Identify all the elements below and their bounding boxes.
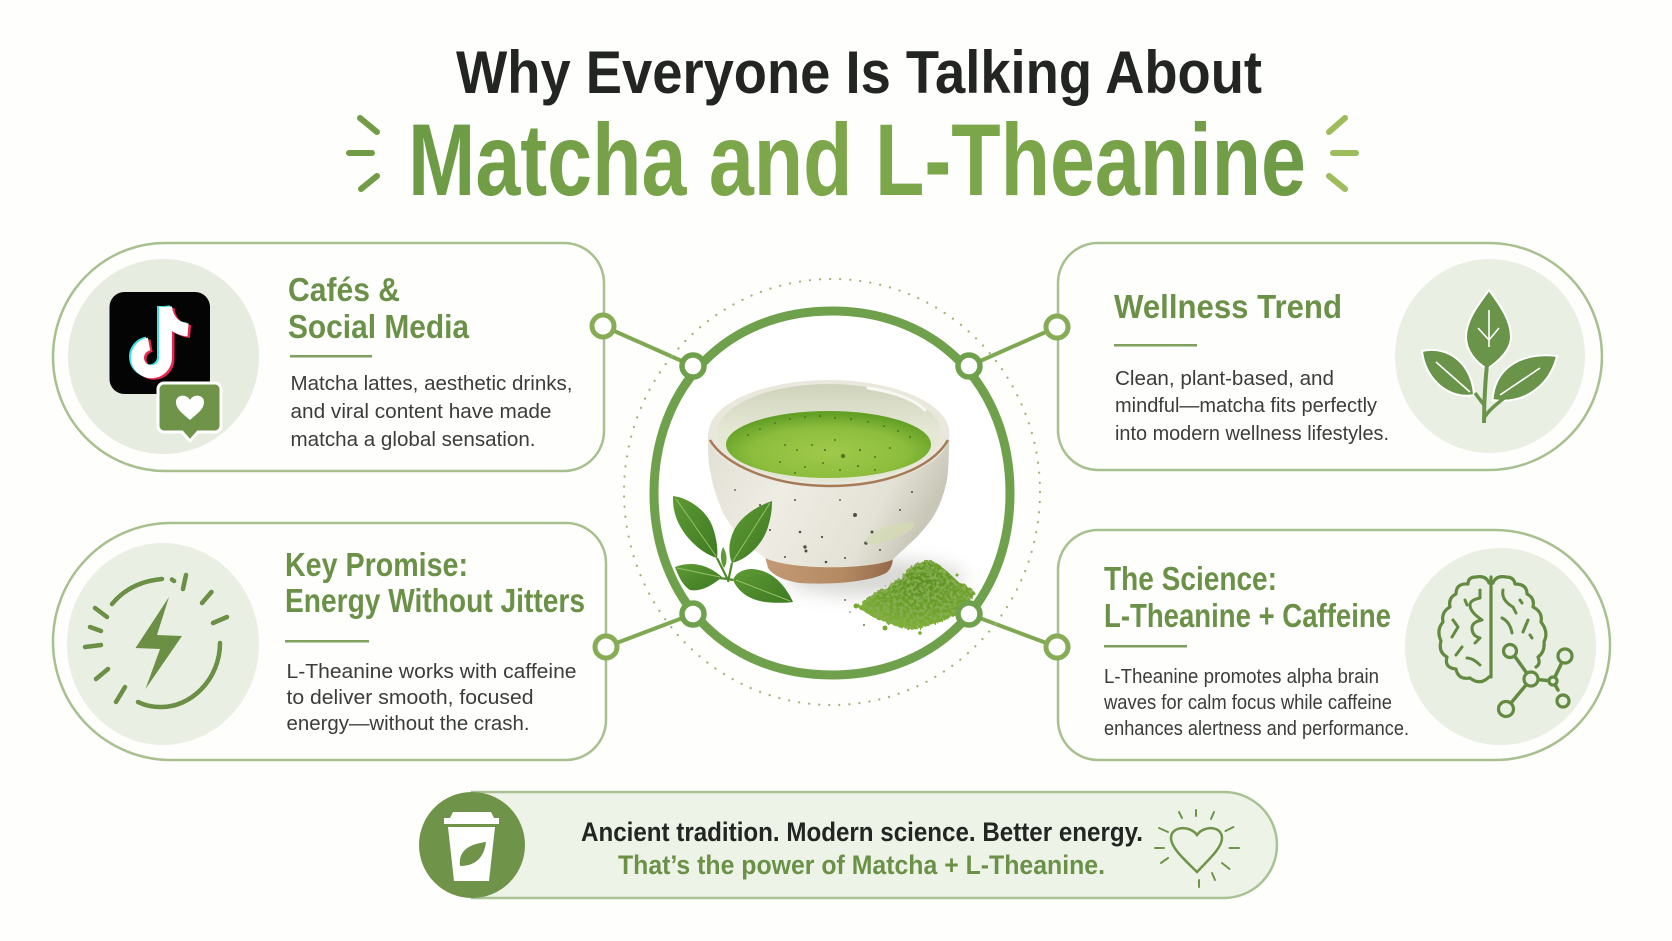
body text: Clean, plant-based, and [1115, 367, 1334, 390]
body text [1103, 665, 1409, 740]
body text [286, 660, 576, 735]
matcha surface [726, 411, 931, 478]
bowl shadow [785, 560, 965, 596]
rim brown edge [710, 440, 948, 486]
body text: and viral content have made [290, 400, 552, 423]
heading: Wellness Trend [1114, 289, 1342, 326]
heading: Social Media [288, 309, 469, 346]
heading: Cafés & [288, 272, 400, 309]
panel: wellness trend [1058, 243, 1602, 470]
connector nodes: ring [682, 355, 980, 625]
body text: waves for calm focus while caffeine [1103, 691, 1392, 714]
icon: brain and molecule [1439, 577, 1572, 716]
rim highlight [868, 388, 925, 410]
bowl glaze tint [863, 518, 917, 548]
icon circle [1405, 548, 1596, 745]
bowl rim [708, 380, 950, 487]
bowl foot [765, 556, 893, 584]
icon circle [1395, 259, 1585, 453]
body text: to deliver smooth, focused [286, 686, 534, 709]
icon circle [68, 259, 259, 454]
icon: tiktok [110, 292, 210, 394]
heading [285, 547, 585, 620]
icon: right sparkle rays [1329, 118, 1356, 189]
heading rule [285, 640, 369, 642]
matcha speckles [747, 415, 911, 474]
body text: enhances alertness and performance. [1104, 717, 1409, 740]
heading rule [1104, 645, 1187, 648]
body text: Matcha lattes, aesthetic drinks, [290, 372, 572, 395]
heading [1104, 561, 1391, 635]
card outline [53, 243, 604, 471]
icon: matcha bowl [708, 380, 950, 584]
body text: L-Theanine works with caffeine [286, 660, 576, 683]
panel: key promise [53, 523, 606, 760]
body text [1115, 367, 1389, 445]
callout line 2: That’s the power of Matcha + L-Theanine. [618, 850, 1105, 880]
icon: heart bubble [158, 383, 221, 441]
panel: cafes and social media [53, 243, 604, 471]
title [349, 39, 1356, 217]
heading: Key Promise: [285, 547, 468, 584]
icon: tea leaves [673, 496, 793, 603]
card outline [1058, 530, 1610, 760]
icon: lightning bolt [85, 575, 227, 707]
title line 1: Why Everyone Is Talking About [456, 39, 1262, 106]
panel: bottom banner [419, 792, 1277, 898]
connector nodes: outer [592, 315, 1068, 658]
body text: matcha a global sensation. [290, 428, 536, 451]
icon: matcha powder [844, 560, 975, 635]
icon: takeaway cup [419, 792, 525, 898]
icon: leaves [1422, 290, 1557, 423]
callout line 1: Ancient tradition. Modern science. Better energy. [581, 817, 1143, 847]
bowl interior [717, 384, 941, 482]
bowl body [708, 433, 949, 567]
icon: heart with rays [1155, 810, 1239, 887]
main ring [654, 311, 1010, 675]
heading: L-Theanine + Caffeine [1104, 598, 1391, 635]
heading [288, 272, 469, 346]
central matcha illustration [624, 279, 1040, 705]
icon circle [67, 543, 259, 745]
dotted ring [624, 279, 1040, 705]
banner pill [472, 792, 1277, 898]
card outline [53, 523, 606, 760]
body text: mindful—matcha fits perfectly [1115, 394, 1378, 417]
icon: left sparkle rays [349, 118, 377, 189]
body text: into modern wellness lifestyles. [1115, 422, 1389, 445]
title line 2: Matcha and L-Theanine [408, 103, 1306, 217]
connector lines [603, 326, 1057, 647]
body text: energy—without the crash. [286, 712, 530, 735]
heading rule [1114, 344, 1197, 346]
body text: L-Theanine promotes alpha brain [1104, 665, 1379, 688]
panel: the science [1058, 530, 1610, 760]
heading: Energy Without Jitters [285, 583, 585, 620]
card outline [1058, 243, 1602, 470]
bowl speckles [734, 489, 913, 563]
heading rule [290, 355, 372, 358]
heading: The Science: [1104, 561, 1277, 598]
body text [290, 372, 572, 451]
